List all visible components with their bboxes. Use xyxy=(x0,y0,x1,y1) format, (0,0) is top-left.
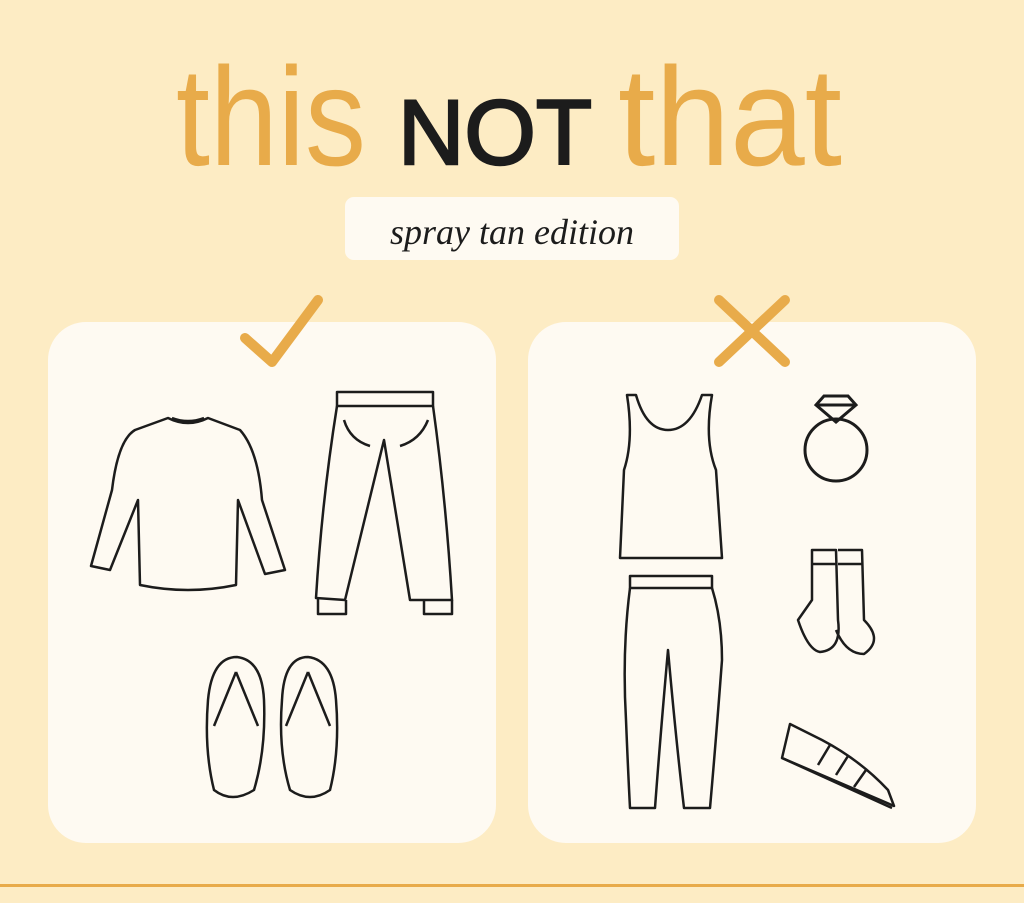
bottom rule xyxy=(0,884,1024,887)
subtitle box: spray tan edition xyxy=(390,212,634,252)
icon: ring xyxy=(805,396,867,481)
title: NOT xyxy=(398,82,592,184)
icon: socks xyxy=(798,550,874,654)
icon: long sleeve shirt xyxy=(91,418,285,590)
icon: flip flops xyxy=(207,657,337,797)
subtitle box xyxy=(345,197,679,260)
icon: jogger pants xyxy=(316,392,452,614)
icon: tank top xyxy=(620,395,722,558)
title: this xyxy=(176,38,366,195)
panel: this (do wear) xyxy=(48,300,496,843)
title xyxy=(176,38,842,195)
title: that xyxy=(618,38,842,195)
icon: check mark xyxy=(245,300,318,362)
icon: sneaker xyxy=(782,724,894,808)
icon: leggings xyxy=(625,576,722,808)
panel: that (don't wear) xyxy=(528,300,976,843)
icon: X mark xyxy=(719,300,785,362)
